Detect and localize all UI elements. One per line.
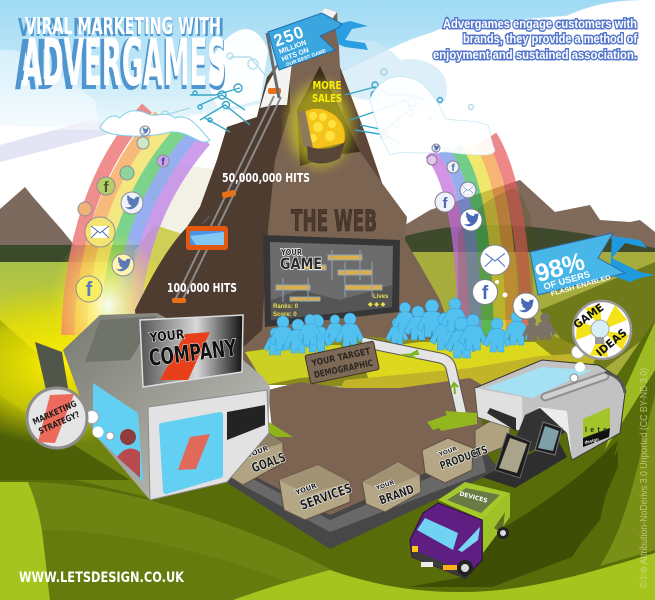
- cable car line: [172, 88, 281, 303]
- target demographic sign: [305, 341, 379, 384]
- pipe with arrows: [362, 342, 462, 416]
- grey figures: [522, 313, 556, 341]
- cloud left: [100, 111, 210, 142]
- left glass wall: [93, 383, 143, 482]
- treasure chest of gold: [298, 108, 345, 164]
- box: your goals: GOALS: [250, 450, 288, 476]
- box: your goals: YOUR: [245, 444, 270, 460]
- website url: WWW.LETSDESIGN.CO.UK: [19, 570, 185, 586]
- green arrow towards factory: [427, 411, 477, 431]
- box: your brand: BRAND: [377, 482, 416, 507]
- box: your brand: YOUR: [374, 479, 396, 492]
- game score labels: Lives: [373, 294, 389, 300]
- cliff under plateau: [240, 378, 482, 518]
- title: VIRAL MARKETING WITH: [25, 14, 221, 40]
- more sales label: SALES: [312, 92, 342, 105]
- social icons left: [76, 126, 169, 302]
- more sales label: MORE: [312, 79, 342, 92]
- game warehouse shelves: [276, 250, 382, 302]
- your game label: YOUR: [280, 248, 302, 257]
- distant mountains left: [0, 187, 75, 246]
- description text: [433, 16, 638, 62]
- box: your services: YOUR: [294, 482, 318, 497]
- right field: [405, 225, 655, 420]
- left field: [0, 225, 200, 372]
- your game label: [280, 248, 322, 273]
- game ideas thought bubble: [570, 301, 631, 382]
- flag: 250 million hits: [267, 13, 368, 98]
- background clouds: [0, 0, 655, 235]
- infographic scene: ADVERGAMES: [15, 26, 227, 106]
- rainbow shade over hill: [458, 188, 533, 320]
- infographic scene: ADVERGAMES: [22, 26, 226, 101]
- flag: 98% of users flash enabled: [530, 233, 655, 301]
- your company building: [35, 313, 270, 500]
- flag: 98% of users flash enabled: FLASH ENABLED: [550, 274, 612, 298]
- company sign: [140, 315, 243, 387]
- your game label: GAME: [280, 254, 322, 273]
- marketing strategy thought bubble: [27, 388, 114, 448]
- lets design logo: [583, 407, 610, 447]
- social icons left: f: [86, 279, 93, 301]
- label 50,000,000 hits: 50,000,000 HITS: [222, 171, 310, 185]
- social icons right: f: [482, 283, 489, 304]
- game screen: [263, 235, 400, 327]
- flag: 250 million hits: HITS ON: [281, 47, 310, 63]
- distant mountains right: [405, 180, 655, 250]
- company sign: COMPANY: [148, 335, 238, 372]
- marketing strategy thought bubble: MARKETING: [31, 399, 78, 428]
- green arrow into company cliff: [248, 418, 293, 437]
- right rainbow: [430, 136, 527, 350]
- box behind products: [475, 420, 510, 456]
- tablet device small: [535, 422, 562, 455]
- goods door: [227, 405, 265, 440]
- target demographic sign: DEMOGRAPHIC: [313, 359, 374, 381]
- social icons right: f: [451, 163, 455, 174]
- title: [15, 13, 227, 106]
- foreground hills: [0, 320, 655, 600]
- box: your products: [422, 436, 490, 483]
- game ideas thought bubble: GAME: [571, 301, 606, 331]
- box: your goals: [227, 432, 288, 485]
- target demographic sign: YOUR TARGET: [310, 347, 372, 369]
- game score labels: [273, 294, 389, 318]
- main mountain: [135, 8, 470, 385]
- flag: 98% of users flash enabled: OF USERS: [542, 269, 591, 292]
- game score labels: Ranks: 0: [273, 304, 299, 310]
- device factory: [475, 360, 625, 460]
- company sign: YOUR: [148, 327, 185, 346]
- social icons left: f: [161, 157, 165, 168]
- sky background: [0, 0, 655, 300]
- the web carved title: THE WEB: [291, 204, 377, 238]
- cave of treasure: [288, 66, 360, 167]
- box: your products: YOUR: [437, 445, 458, 459]
- social icons right: f: [442, 195, 448, 212]
- left rainbow: [68, 108, 205, 335]
- social icons left: f: [104, 179, 110, 196]
- flag: 250 million hits: MILLION: [278, 39, 308, 56]
- circuit network right: [345, 69, 474, 146]
- audience right: [386, 298, 531, 358]
- audience left: [264, 313, 364, 355]
- box: your services: [279, 465, 354, 520]
- licence credit: ©①⊜ Attribution-NoDerivs 3.0 Unported (CC BY-ND 3.0): [639, 368, 650, 588]
- title: VIRAL MARKETING WITH: [18, 13, 224, 42]
- hay plateau: [245, 330, 600, 392]
- yellow glow under the left rainbow: [0, 285, 185, 445]
- device platform: [482, 440, 567, 488]
- box: your products: PRODUCTS: [438, 443, 490, 472]
- lets design logo: lets: [585, 427, 607, 434]
- front glass with logo: [162, 415, 220, 491]
- flag: 98% of users flash enabled: 98%: [532, 247, 588, 288]
- game score labels: Score: 0: [273, 312, 297, 318]
- lets design logo: design: [584, 437, 600, 445]
- game score labels: ◆ ◆ ◆: [367, 301, 386, 308]
- game ideas thought bubble: IDEAS: [594, 326, 630, 359]
- label 100,000 hits: 100,000 HITS: [167, 281, 237, 295]
- flag: 250 million hits: OUR BEST GAME: [285, 48, 328, 68]
- box: your services: SERVICES: [298, 481, 354, 514]
- conveyor belt: [226, 448, 500, 549]
- marketing strategy thought bubble: STRATEGY?: [37, 410, 82, 437]
- delivery truck: [410, 482, 510, 578]
- delivery truck: DEVICES: [459, 490, 488, 505]
- social icons right: [427, 144, 539, 319]
- more sales label: [312, 79, 342, 105]
- cable car cabin: [186, 216, 228, 250]
- cloud right: [370, 77, 495, 155]
- box: your brand: [362, 462, 421, 512]
- rainbow light burst: [50, 230, 166, 380]
- tablet device: [495, 433, 531, 478]
- flag: 250 million hits: 250: [271, 22, 307, 51]
- circuit network left: [161, 53, 265, 132]
